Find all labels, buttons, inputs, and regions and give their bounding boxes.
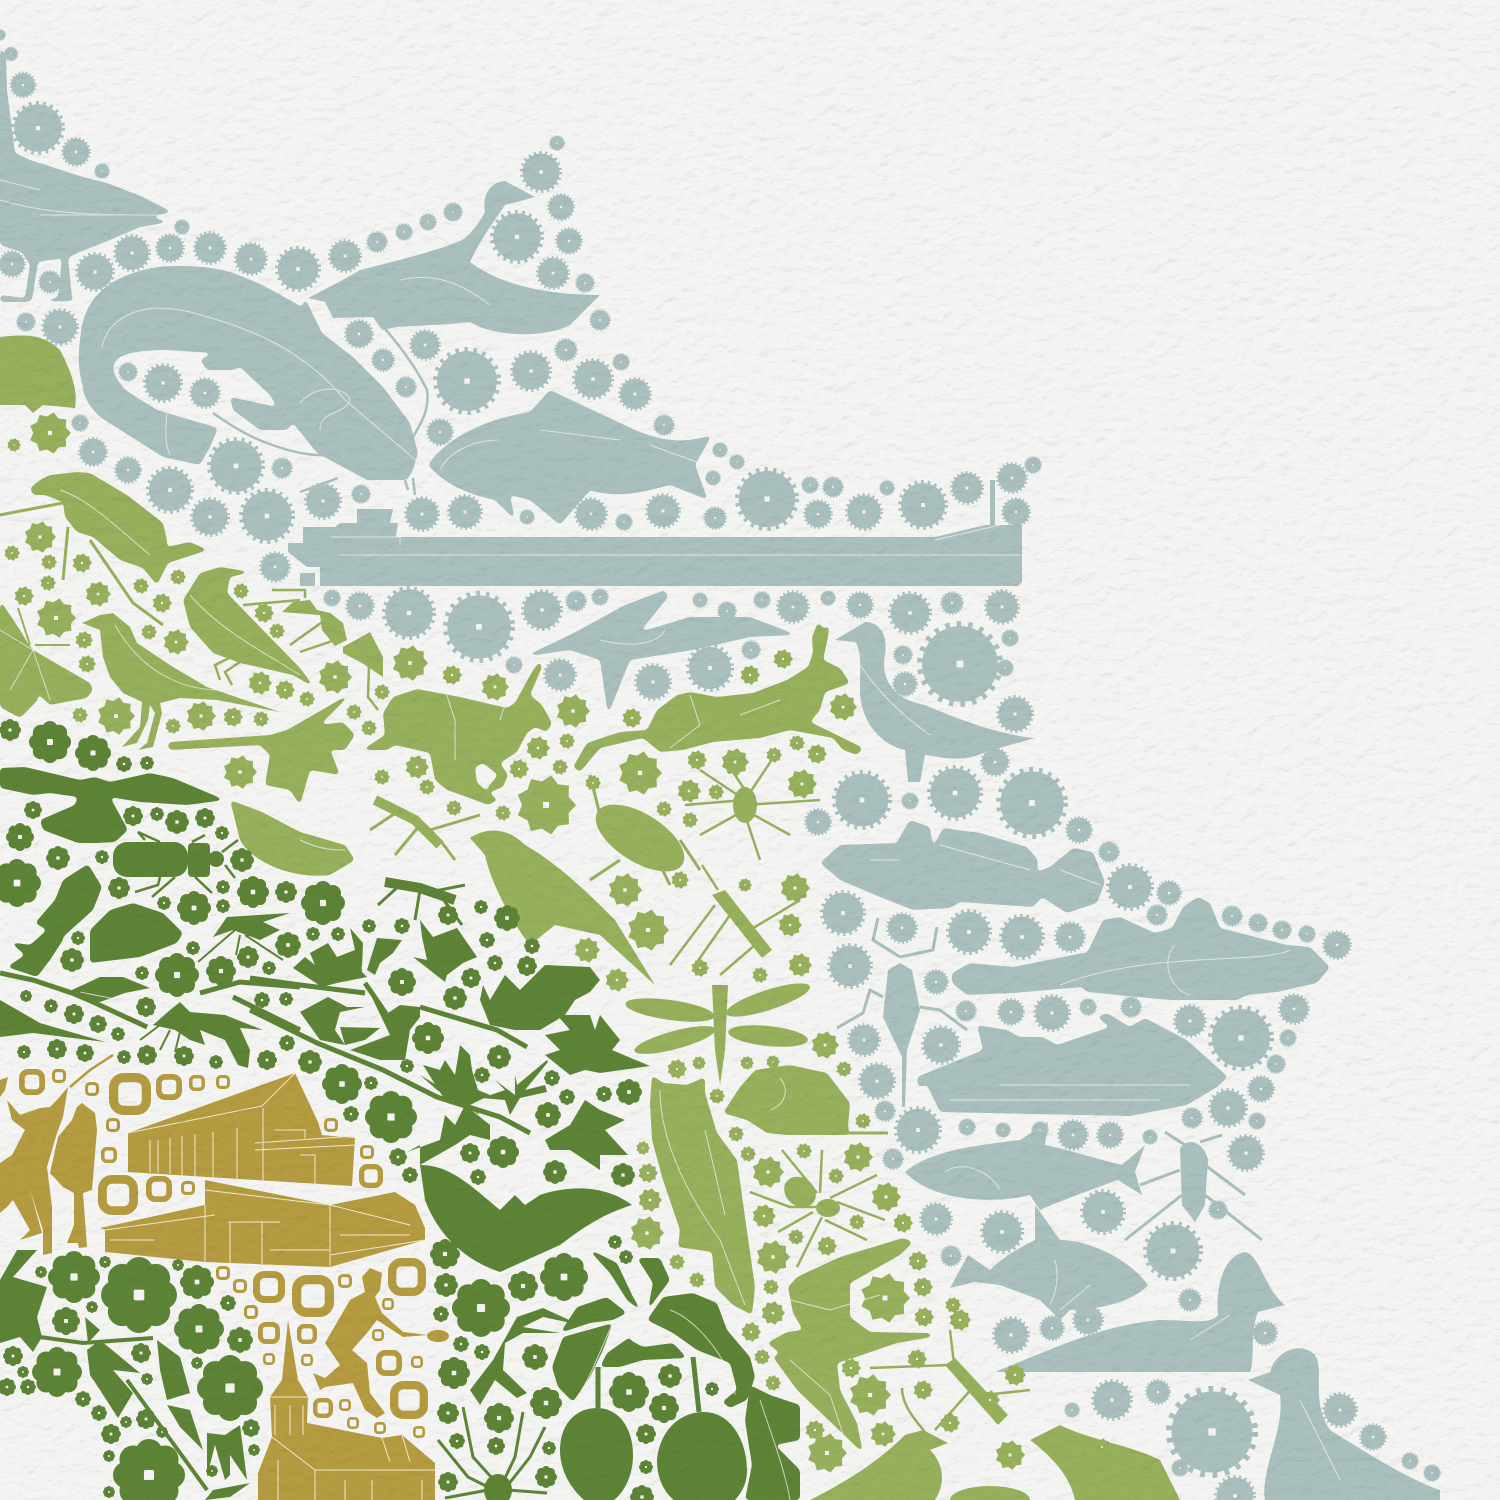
icon: plum plant xyxy=(470,1248,800,1500)
icon: badminton player xyxy=(313,1268,449,1418)
icon: songbird left xyxy=(82,613,280,750)
icon: left branch xyxy=(0,973,300,1042)
icon: standing goose xyxy=(835,622,1035,782)
dark green woodland zone xyxy=(0,719,800,1500)
icon: swift xyxy=(767,1238,932,1453)
icon: carp xyxy=(428,390,712,525)
icon: hare running xyxy=(573,620,863,772)
icon: spider lower xyxy=(750,1150,885,1267)
icon: grebe xyxy=(995,1252,1285,1372)
icon: beetle green xyxy=(585,775,700,885)
icon: church xyxy=(258,1320,435,1500)
icon: silver fish xyxy=(905,1122,1145,1210)
icon: raven xyxy=(183,567,315,688)
fine white line details xyxy=(0,180,1340,1500)
gold human zone xyxy=(0,1055,449,1500)
icon: water bug xyxy=(1125,1132,1262,1240)
icon: ferret xyxy=(1030,1425,1180,1500)
icon: spider bottom xyxy=(438,1407,547,1500)
icon: barge xyxy=(288,480,1022,586)
icon: hare sitting xyxy=(362,661,552,805)
icon: lapwing bottom xyxy=(810,1388,948,1500)
icon: two leaves xyxy=(7,864,102,977)
icon: finch xyxy=(470,831,655,985)
icon: leaves lower left xyxy=(0,1250,250,1500)
icon: flying duck xyxy=(308,181,600,334)
icon: bat xyxy=(420,1165,632,1272)
icon: black ant xyxy=(378,882,465,925)
icon: ant upper xyxy=(243,590,383,710)
icon: goose top left xyxy=(0,45,172,302)
light green stars xyxy=(4,412,1111,1473)
icon: duck bottom right xyxy=(1248,1348,1440,1500)
icon: building two xyxy=(100,1180,425,1267)
gold rings xyxy=(22,1071,424,1437)
icon: small leaf xyxy=(72,977,150,1002)
icon: goby fish xyxy=(820,820,1105,913)
icon: flying bird xyxy=(523,590,797,715)
icon: partial bottom animal xyxy=(950,1486,1030,1500)
icon: longhorn beetle xyxy=(870,1330,1030,1430)
icon: wasp xyxy=(198,913,290,962)
icon: jet ski xyxy=(917,1013,1228,1116)
icon: butterfly xyxy=(0,600,93,718)
icon: stag beetle xyxy=(113,832,238,897)
icon: vole xyxy=(230,800,355,876)
icon: small ant xyxy=(370,800,480,860)
icon: hamster top left xyxy=(0,336,76,413)
icon: people waving xyxy=(0,1055,113,1255)
icon: crayfish xyxy=(140,1002,263,1068)
icon: flowering branch xyxy=(250,920,650,1170)
icon: eagle xyxy=(0,767,225,843)
icon: catfish xyxy=(79,266,428,495)
icon: water insect xyxy=(837,918,967,1107)
icon: long fish xyxy=(952,897,1330,1000)
icon: owl xyxy=(650,1075,755,1315)
icon: spider upper xyxy=(685,755,820,860)
light green land zone xyxy=(0,336,1180,1500)
icon: damselfly xyxy=(167,692,355,805)
dark flowers xyxy=(0,719,719,1500)
icon: round leaf xyxy=(90,903,183,963)
icon: bream xyxy=(950,1205,1148,1320)
icon: building one xyxy=(128,1073,355,1186)
icon: dragonfly xyxy=(624,977,813,1085)
icon: chafer beetle top xyxy=(0,472,208,625)
icon: guinea pig xyxy=(723,1065,888,1135)
icon: long-horned insect xyxy=(670,865,800,975)
